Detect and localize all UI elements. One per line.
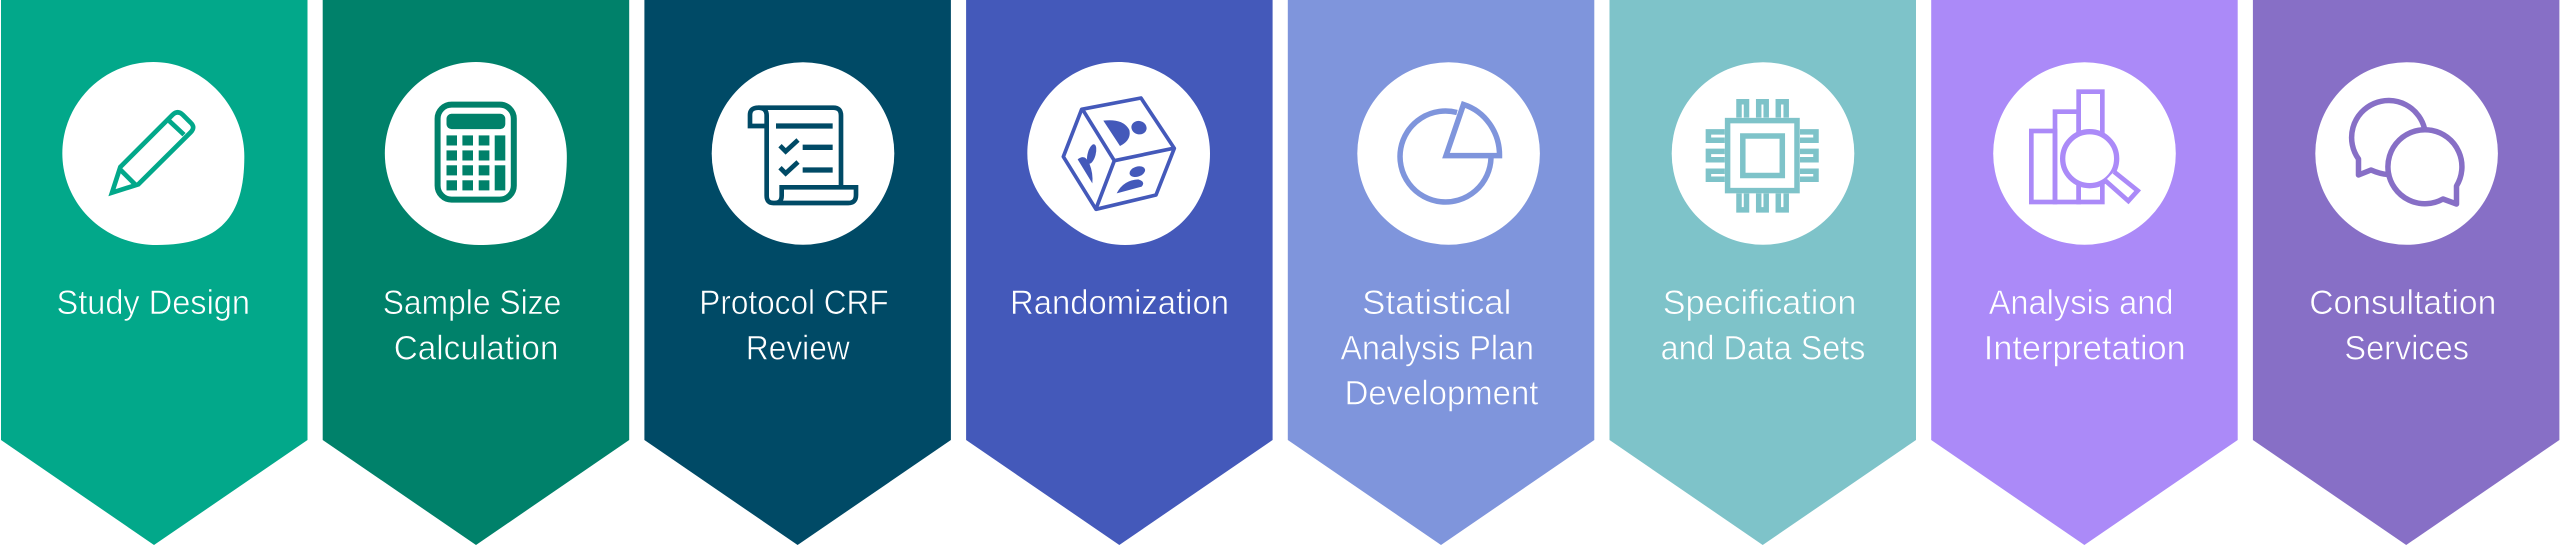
label: specification and data sets: and Data Sets (1661, 330, 1865, 368)
label: sample size calculation: Sample Size (383, 284, 561, 322)
icon background: protocol CRF review (712, 62, 894, 245)
icon: pencil (112, 112, 193, 193)
panel: study design (1, 0, 308, 545)
label: protocol CRF review (699, 284, 889, 368)
icon: pie chart (1400, 104, 1500, 202)
label: randomization: Randomization (1010, 284, 1229, 322)
label: statistical analysis plan development: Statistical (1362, 284, 1511, 322)
banner: sample size calculation (323, 0, 629, 545)
icon: scroll checklist (750, 108, 856, 203)
label: protocol CRF review: Protocol CRF (699, 284, 889, 322)
label: protocol CRF review: Review (746, 330, 850, 368)
label: specification and data sets (1661, 284, 1865, 368)
icon: calculator (438, 105, 514, 200)
banner: consultation services (2253, 0, 2559, 545)
icon background: statistical analysis plan development (1357, 62, 1540, 245)
panel: analysis and interpretation (1931, 0, 2238, 545)
icon background: consultation services (2315, 62, 2498, 245)
label: sample size calculation (383, 284, 561, 368)
icon background: sample size calculation (385, 62, 567, 245)
panel: specification and data sets (1610, 0, 1916, 545)
banner: analysis and interpretation (1931, 0, 2238, 545)
icon: bar chart with magnifier (2031, 92, 2138, 202)
label: statistical analysis plan development: Development (1345, 374, 1539, 412)
panel: statistical analysis plan development (1288, 0, 1594, 545)
label: consultation services: Consultation (2309, 284, 2496, 322)
icon background: randomization (1027, 62, 1210, 245)
banner: protocol CRF review (644, 0, 951, 545)
banner: randomization (966, 0, 1273, 545)
banner: specification and data sets (1610, 0, 1916, 545)
panel: consultation services (2253, 0, 2559, 545)
panel: sample size calculation (323, 0, 629, 545)
label: sample size calculation: Calculation (394, 330, 558, 368)
panel: protocol CRF review (644, 0, 951, 545)
label: consultation services: Services (2344, 330, 2469, 368)
icon: dice (1063, 98, 1174, 209)
label: analysis and interpretation: Analysis and (1989, 284, 2174, 322)
icon background: study design (62, 62, 244, 245)
label: study design: Study Design (56, 284, 250, 322)
icon background: specification and data sets (1672, 62, 1854, 245)
icon: microchip (1708, 102, 1816, 210)
label: analysis and interpretation (1984, 284, 2186, 368)
label: analysis and interpretation: Interpretation (1984, 330, 2186, 368)
banner: statistical analysis plan development (1288, 0, 1594, 545)
icon background: analysis and interpretation (1993, 62, 2176, 245)
label: specification and data sets: Specification (1663, 284, 1856, 322)
label: statistical analysis plan development (1340, 284, 1539, 412)
panel: randomization (966, 0, 1273, 545)
label: statistical analysis plan development: Analysis Plan (1340, 330, 1534, 368)
icon: speech bubbles (2352, 101, 2462, 204)
banner: study design (1, 0, 308, 545)
label: consultation services (2309, 284, 2496, 368)
